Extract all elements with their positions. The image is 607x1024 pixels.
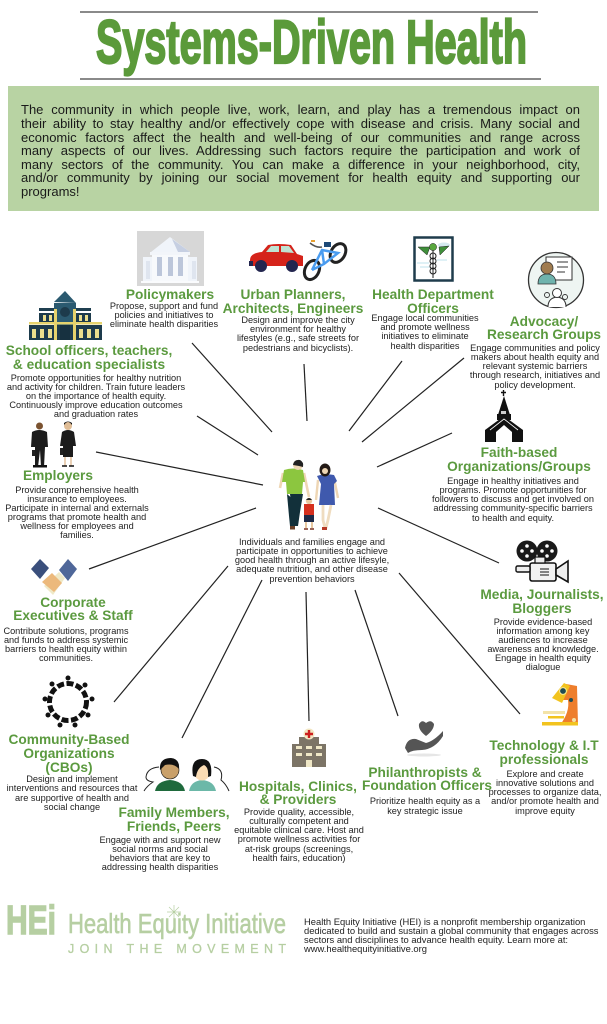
panel: employers: wellness for employees and <box>19 521 134 531</box>
panel: technology: improve equity <box>515 806 575 816</box>
panel: family members: addressing health disparities <box>102 862 219 872</box>
panel: employers: families. <box>60 530 94 540</box>
icon: handshake <box>31 559 77 595</box>
icon: business people <box>31 422 76 468</box>
panel: center individuals and families <box>235 460 389 584</box>
panel: community-based organizations: Design and implement <box>26 774 118 784</box>
logo: Health Equity Initiative <box>6 897 286 956</box>
panel: advocacy: Advocacy/ <box>510 314 578 329</box>
panel: technology: and/or promote health and <box>491 796 599 806</box>
icon: bicycle <box>301 240 349 282</box>
intro text panel: and/or community by joining our social movement for health equity and supporting our <box>21 170 580 185</box>
panel: community-based organizations: are supportive of health and <box>15 793 129 803</box>
footer description <box>303 916 599 954</box>
panel: faith-based: to health and equity. <box>472 513 554 523</box>
panel: policymakers: Policymakers <box>126 287 215 302</box>
panel: school officers: on the importance of health equity. <box>26 391 166 401</box>
panel: employers: programs that promote health and <box>8 512 146 522</box>
panel: technology: professionals <box>500 752 589 767</box>
panel: center individuals and families: Individuals and families engage and <box>239 537 385 547</box>
panel: family members: behaviors that are key to <box>110 853 210 863</box>
panel: corporate: Contribute solutions, programs <box>3 626 129 636</box>
panel: faith-based: addressing community-specific barriers <box>433 503 593 513</box>
panel: media: awareness and knowledge. <box>487 644 599 654</box>
panel: technology <box>489 683 601 816</box>
icon: hospital building <box>292 728 326 767</box>
panel: urban planners: lifestyles (e.g., safe streets for <box>237 333 359 343</box>
panel: family members <box>99 758 230 872</box>
icon: red car <box>249 244 303 272</box>
panel: center individuals and families: good health through an active lifesyle, <box>235 555 389 565</box>
panel: family members: Friends, Peers <box>127 819 222 834</box>
panel: corporate: Corporate <box>40 595 106 610</box>
panel: philanthropists <box>362 721 492 816</box>
panel: hospitals: promote wellness activities for <box>238 834 360 844</box>
intro text panel <box>8 86 599 211</box>
panel: faith-based: Faith-based <box>481 445 557 460</box>
panel: advocacy: Research Groups <box>487 327 601 342</box>
panel: technology: processes to organize data, <box>489 787 601 797</box>
panel: school officers: and graduation rates <box>54 409 139 419</box>
icon: family <box>280 460 338 530</box>
panel: advocacy <box>470 252 601 390</box>
intro text panel: their ability to stay healthy and/or effectively cope with disease and crisis. Many social and <box>21 116 580 131</box>
panel: faith-based <box>432 390 594 523</box>
panel: faith-based: Organizations/Groups <box>447 459 591 474</box>
panel: health department: Engage local communities <box>371 313 479 323</box>
logo: Health Equity Initiative: HEi <box>6 897 56 943</box>
panel: family members: Engage with and support new <box>99 835 221 845</box>
panel: faith-based: Engage in healthy initiatives and <box>447 476 579 486</box>
panel: health department: initiatives to eliminate <box>381 331 469 341</box>
icon: film camera <box>516 540 568 582</box>
panel: community-based organizations: (CBOs) <box>45 760 93 775</box>
panel: urban planners: environment for healthy <box>250 324 346 334</box>
panel: technology: Explore and create <box>506 769 584 779</box>
panel: faith-based: programs. Promote opportunities for <box>439 485 587 495</box>
panel: urban planners: Design and improve the city <box>241 315 355 325</box>
panel: advocacy: policy development. <box>494 380 576 390</box>
intro text panel: many sectors of the community. You can make a difference in your neighborhood, city, <box>21 157 580 172</box>
panel: health department: and promote wellness <box>380 322 470 332</box>
icon: two people with speech outlines <box>144 758 229 791</box>
panel: school officers: School officers, teachers, <box>6 343 172 358</box>
panel: advocacy: makers about health equity and <box>471 352 599 362</box>
icon: school building <box>29 291 102 340</box>
panel: urban planners: Architects, Engineers <box>223 301 364 316</box>
panel: hospitals: Hospitals, Clinics, <box>239 779 357 794</box>
panel: community-based organizations: Organizations <box>23 746 115 761</box>
panel: media: Engage in health equity <box>495 653 591 663</box>
footer description: sectors and disciplines to advance health equity. Learn more at: <box>304 934 568 945</box>
panel: media: audiences to increase <box>498 635 588 645</box>
panel: community-based organizations: interventions and resources that <box>7 783 138 793</box>
panel: corporate: barriers to health equity within <box>5 644 127 654</box>
panel: employers: Participate in internal and externals <box>5 503 149 513</box>
icon: hand holding heart <box>405 721 443 756</box>
footer description: Health Equity Initiative (HEI) is a nonprofit membership organization <box>304 916 585 927</box>
panel: center individuals and families: adequate nutrition, and other disease <box>236 564 388 574</box>
panel: media: dialogue <box>526 662 560 672</box>
panel: school officers: Continuously improve education outcomes <box>9 400 183 410</box>
panel: corporate: and funds to address systemic <box>4 635 128 645</box>
panel: family members: social norms and social <box>112 844 208 854</box>
panel: health department: health disparities <box>391 341 460 351</box>
logo: Health Equity Initiative: Health Equity Initiative <box>68 908 286 939</box>
panel: philanthropists: Prioritize health equity as a <box>370 796 481 806</box>
panel: philanthropists: Foundation Officers <box>362 778 492 793</box>
panel: technology: Technology & I.T <box>489 738 599 753</box>
footer description: www.healthequityinitiative.org <box>303 943 427 954</box>
panel: health department: Health Department <box>372 287 494 302</box>
logo: Health Equity Initiative: JOIN THE MOVEMENT <box>68 942 286 956</box>
panel: community-based organizations <box>7 676 138 812</box>
radiating connector lines <box>89 343 520 738</box>
icon: presenter in circle <box>528 252 584 308</box>
panel: community-based organizations: social change <box>44 802 100 812</box>
intro text panel: economic factors affect the health and well-being of our communities and range across <box>21 130 580 145</box>
panel: hospitals: Provide quality, accessible, <box>244 807 354 817</box>
panel: school officers: and activity for children. Train future leaders <box>7 382 186 392</box>
panel: media <box>480 540 604 672</box>
panel: technology: innovative solutions and <box>496 778 594 788</box>
panel: hospitals: health fairs, education) <box>253 853 345 863</box>
panel: community-based organizations: Community-Based <box>9 732 129 747</box>
panel: hospitals: & Providers <box>260 792 337 807</box>
icon: church <box>485 390 523 442</box>
panel: corporate: communities. <box>39 653 93 663</box>
panel: hospitals <box>234 728 364 863</box>
panel: hospitals: equitable clinical care. Host and <box>234 825 364 835</box>
icon: ring of people <box>42 676 94 728</box>
panel: health department: Officers <box>407 301 459 316</box>
intro text panel: many aspects of our lives. Addressing such factors require the participation and work of <box>21 143 580 158</box>
icon: caduceus <box>414 238 452 280</box>
panel: employers <box>5 422 149 540</box>
panel: employers: insurance to employees. <box>27 494 127 504</box>
panel: family members: Family Members, <box>118 805 230 820</box>
panel: advocacy: Engage communities and policy <box>470 343 600 353</box>
panel: school officers: Promote opportunities for healthy nutrition <box>11 373 181 383</box>
panel: corporate <box>3 559 133 663</box>
panel: hospitals: at-risk groups (screenings, <box>245 844 353 854</box>
footer description: dedicated to build and sustain a global community that engages across <box>304 925 599 936</box>
panel: school officers <box>6 291 186 419</box>
panel: policymakers: Propose, support and fund <box>110 301 218 311</box>
panel: philanthropists: key strategic issue <box>387 806 463 816</box>
panel: center individuals and families: prevention behaviors <box>269 574 355 584</box>
panel: advocacy: through research, initiatives and <box>470 370 600 380</box>
panel: center individuals and families: participate in opportunities to achieve <box>236 546 388 556</box>
panel: policymakers: eliminate health disparities <box>110 319 219 329</box>
panel: urban planners: pedestrians and bicyclists). <box>243 343 353 353</box>
panel: hospitals: culturally competent and <box>249 816 349 826</box>
panel: health department <box>371 238 494 351</box>
panel: media: Media, Journalists, <box>480 587 604 602</box>
panel: policymakers <box>110 231 219 329</box>
panel: corporate: Executives & Staff <box>13 608 133 623</box>
intro text panel: The community in which people live, work, learn, and play has a tremendous impact on <box>21 102 580 117</box>
panel: media: information among key <box>497 626 590 636</box>
panel: philanthropists: Philanthropists & <box>368 765 482 780</box>
intro text panel: programs! <box>21 184 80 199</box>
panel: employers: Provide comprehensive health <box>15 485 139 495</box>
panel: school officers: & education specialists <box>13 357 165 372</box>
panel: media: Bloggers <box>512 601 572 616</box>
icon: microscope <box>542 683 578 726</box>
panel: faith-based: followers to discuss and get involved on <box>432 494 594 504</box>
panel: employers: Employers <box>23 468 93 483</box>
panel: advocacy: relevant systemic barriers <box>483 361 588 371</box>
panel: media: Provide evidence-based <box>494 617 592 627</box>
panel: urban planners <box>223 240 364 353</box>
icon: government building <box>137 231 204 286</box>
panel: policymakers: policies and initiatives to <box>114 310 214 320</box>
panel: urban planners: Urban Planners, <box>241 287 345 302</box>
